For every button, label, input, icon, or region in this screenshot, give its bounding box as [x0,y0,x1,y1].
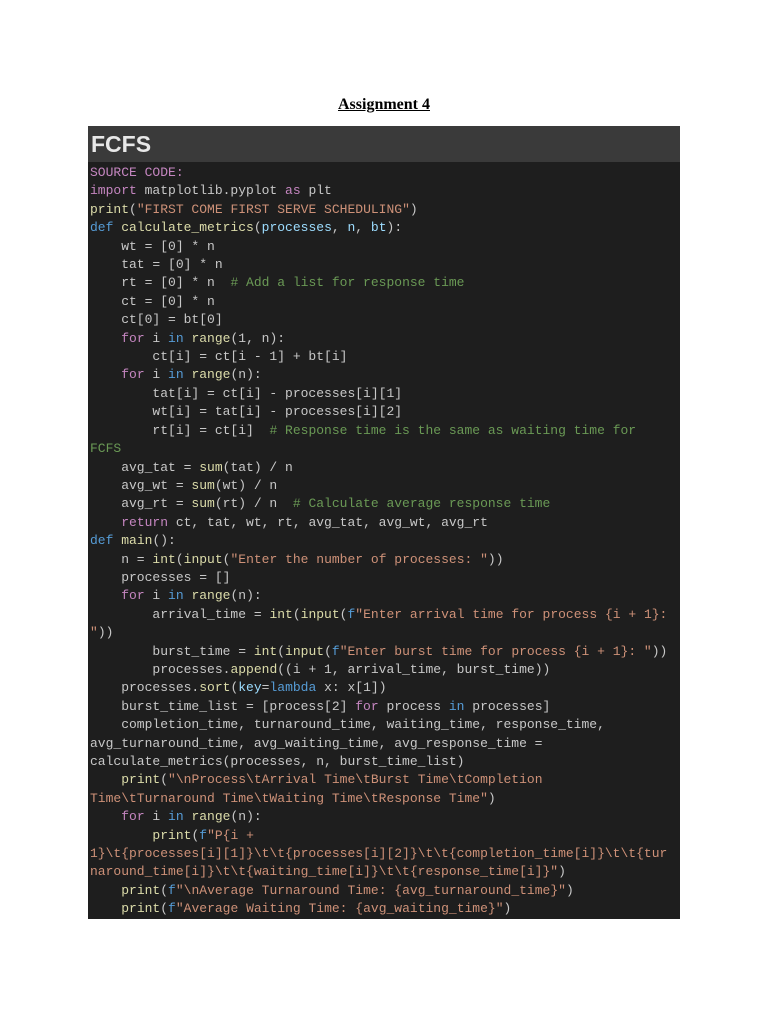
title: Assignment 4 [338,96,430,113]
heading: FCFS [88,126,680,162]
heading: FCFS: FCFS [91,131,151,157]
code text: SOURCE CODE: import matplotlib.pyplot as plt print("FIRST COME FIRST SERVE SCHEDULING") def calculate_metrics(processes, n, bt): wt = [0] * n tat = [0] * n rt = [0] * n # Add a list for response time ct = [0] * n ct[0] = bt[0] for i in range(1, n): ct[i] = ct[i - 1] + bt[i] for i in range(n): tat[i] = ct[i] - processes[i][1] wt[i] = tat[i] - processes[i][2] rt[i] = ct[i] # Response time is the same as waiting time for FCFS avg_tat = sum(tat) / n avg_wt = sum(wt) / n avg_rt = sum(rt) / n # Calculate average response time return ct, tat, wt, rt, avg_tat, avg_wt, avg_rt def main(): n = int(input("Enter the number of processes: ")) processes = [] for i in range(n): arrival_time = int(input(f"Enter arrival time for process {i + 1}: ")) burst_time = int(input(f"Enter burst time for process {i + 1}: ")) processes.append((i + 1, arrival_time, burst_time)) processes.sort(key=lambda x: x[1]) burst_time_list = [process[2] for process in processes] completion_time, turnaround_time, waiting_time, response_time, avg_turnaround_time, avg_waiting_time, avg_response_time = calculate_metrics(processes, n, burst_time_list) print("\nProcess\tArrival Time\tBurst Time\tCompletion Time\tTurnaround Time\tWaiting Time\tResponse Time") for i in range(n): print(f"P{i + 1}\t{processes[i][1]}\t\t{processes[i][2]}\t\t{completion_time[i]}\t\t{tur naround_time[i]}\t\t{waiting_time[i]}\t\t{response_time[i]}") print(f"\nAverage Turnaround Time: {avg_turnaround_time}") print(f"Average Waiting Time: {avg_waiting_time}") [90,165,667,916]
panel: code block [88,126,680,919]
